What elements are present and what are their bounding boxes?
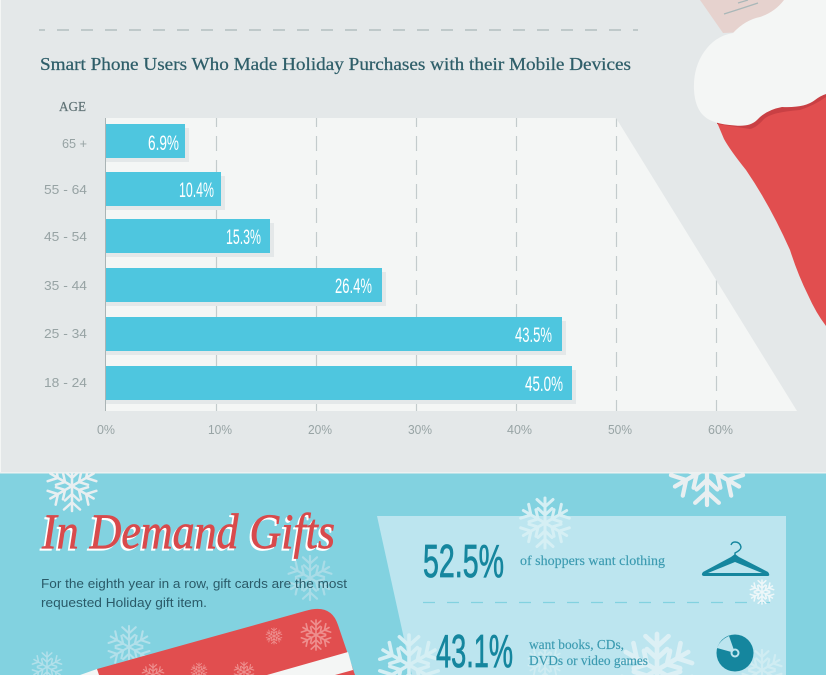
- x axis labels: 40%: [507, 422, 532, 437]
- bar: 18 - 24: 45.0%: [525, 373, 563, 396]
- bar chart: [44, 99, 797, 437]
- x axis labels: 20%: [308, 422, 332, 437]
- bar: 18 - 24: 18 - 24: [44, 375, 87, 390]
- chart title: Smart Phone Users Who Made Holiday Purchases with their Mobile Devices: [40, 54, 631, 74]
- grid lines: [216, 118, 716, 411]
- divider line: [423, 602, 770, 604]
- stat: clothing: [423, 535, 769, 587]
- bar: 45 - 54: 45 - 54: [44, 229, 87, 244]
- stat: clothing: 52.5%: [423, 535, 504, 587]
- panel snowflakes: [378, 498, 783, 675]
- card snowflakes: [142, 620, 331, 675]
- x axis labels: 60%: [708, 422, 733, 437]
- bar: 65 +: [62, 124, 189, 162]
- intro text: requested Holiday gift item.: [41, 595, 207, 610]
- panel: smart phone chart section: [0, 0, 826, 474]
- icon: clothes hanger: [702, 542, 769, 576]
- stat: books and media: DVDs or video games: [529, 654, 648, 669]
- bar: 35 - 44: [44, 268, 386, 306]
- y axis line: [104, 118, 106, 411]
- gift card illustration: [80, 609, 355, 675]
- stat: clothing: of shoppers want clothing: [520, 554, 665, 569]
- intro text: [41, 576, 347, 610]
- stat: books and media: want books, CDs,: [529, 638, 624, 653]
- heading: in demand gifts: In Demand Gifts: [39, 505, 333, 561]
- chart plot background: [106, 118, 797, 411]
- card white stripe: [267, 652, 353, 675]
- hat white fur: [694, 0, 826, 126]
- hat fur shadow: [717, 90, 826, 129]
- heading: in demand gifts: In Demand Gifts: [41, 503, 335, 559]
- x axis labels: [97, 422, 733, 437]
- x axis labels: 30%: [408, 422, 432, 437]
- x axis labels: 10%: [208, 422, 232, 437]
- divider line: [39, 29, 638, 31]
- stat: books and media: [436, 625, 754, 675]
- intro text: For the eighth year in a row, gift cards are the most: [41, 576, 347, 591]
- santa hat illustration: [694, 0, 826, 326]
- card left white stripe: [80, 669, 99, 675]
- bar: 25 - 34: 43.5%: [515, 324, 552, 347]
- snowflakes on blue background: [32, 431, 745, 675]
- y axis title: AGE: [59, 99, 86, 114]
- panel: gift statistics: [377, 498, 786, 675]
- bar: 35 - 44: 26.4%: [335, 275, 372, 298]
- bar: 25 - 34: 25 - 34: [44, 326, 87, 341]
- bar: 55 - 64: 10.4%: [179, 179, 214, 202]
- bar: 55 - 64: 55 - 64: [44, 182, 87, 197]
- bar: 35 - 44: 35 - 44: [44, 278, 87, 293]
- panel: in demand gifts background: [0, 470, 826, 675]
- bar: 55 - 64: [44, 172, 225, 210]
- snowflake on divider: [750, 580, 774, 604]
- santa hat red: [716, 90, 826, 326]
- bar: 45 - 54: [44, 219, 274, 257]
- x axis labels: 50%: [608, 422, 632, 437]
- x axis labels: 0%: [97, 422, 115, 437]
- bar: 25 - 34: [44, 317, 566, 355]
- bar: 18 - 24: [44, 366, 576, 404]
- bar: 45 - 54: 15.3%: [226, 226, 261, 249]
- bar: 65 +: 6.9%: [148, 132, 179, 155]
- icon: disc: [716, 634, 754, 672]
- bar: 65 +: 65 +: [62, 136, 87, 151]
- santa skin: [700, 0, 790, 33]
